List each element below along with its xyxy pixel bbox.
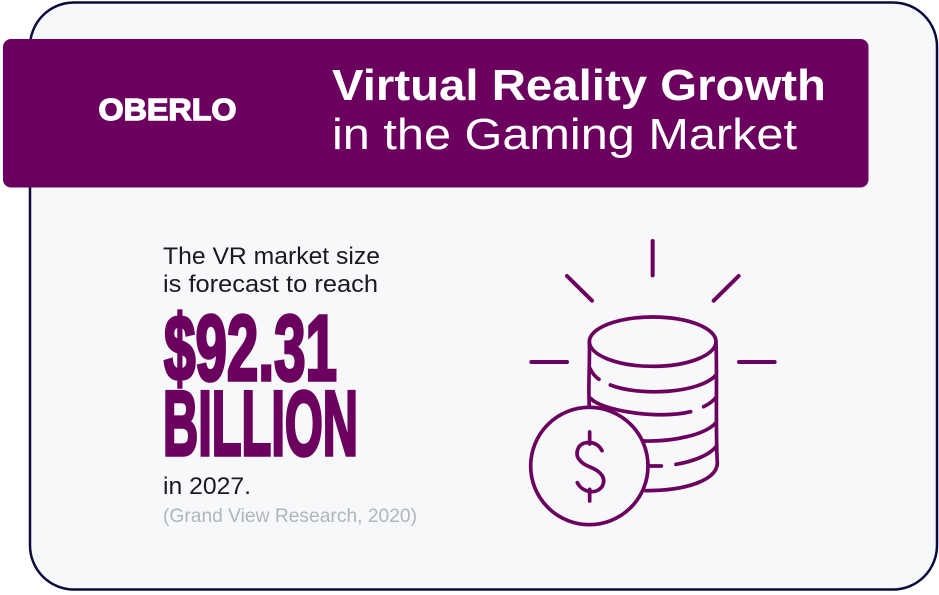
panel: header banner xyxy=(3,39,868,188)
big number: $92.31 billion: $92.31 xyxy=(164,296,337,400)
text block: forecast intro: The VR market size xyxy=(163,243,380,270)
text block: year: in 2027. xyxy=(163,473,251,500)
title xyxy=(332,61,826,159)
icon: coin stack xyxy=(589,317,717,491)
text block: forecast intro xyxy=(163,243,380,298)
icon: coin stack with rays xyxy=(531,241,775,525)
title: in the Gaming Market xyxy=(332,110,797,159)
icon: dollar coin xyxy=(531,407,648,525)
icon: shine rays xyxy=(531,241,775,362)
logo: Oberlo: OBERLO xyxy=(98,92,236,127)
text block: source: (Grand View Research, 2020) xyxy=(163,505,417,527)
text block: forecast intro: is forecast to reach xyxy=(163,271,378,298)
big number: $92.31 billion xyxy=(163,296,358,475)
big number: $92.31 billion: BILLION xyxy=(163,373,358,475)
title: Virtual Reality Growth xyxy=(332,61,826,110)
